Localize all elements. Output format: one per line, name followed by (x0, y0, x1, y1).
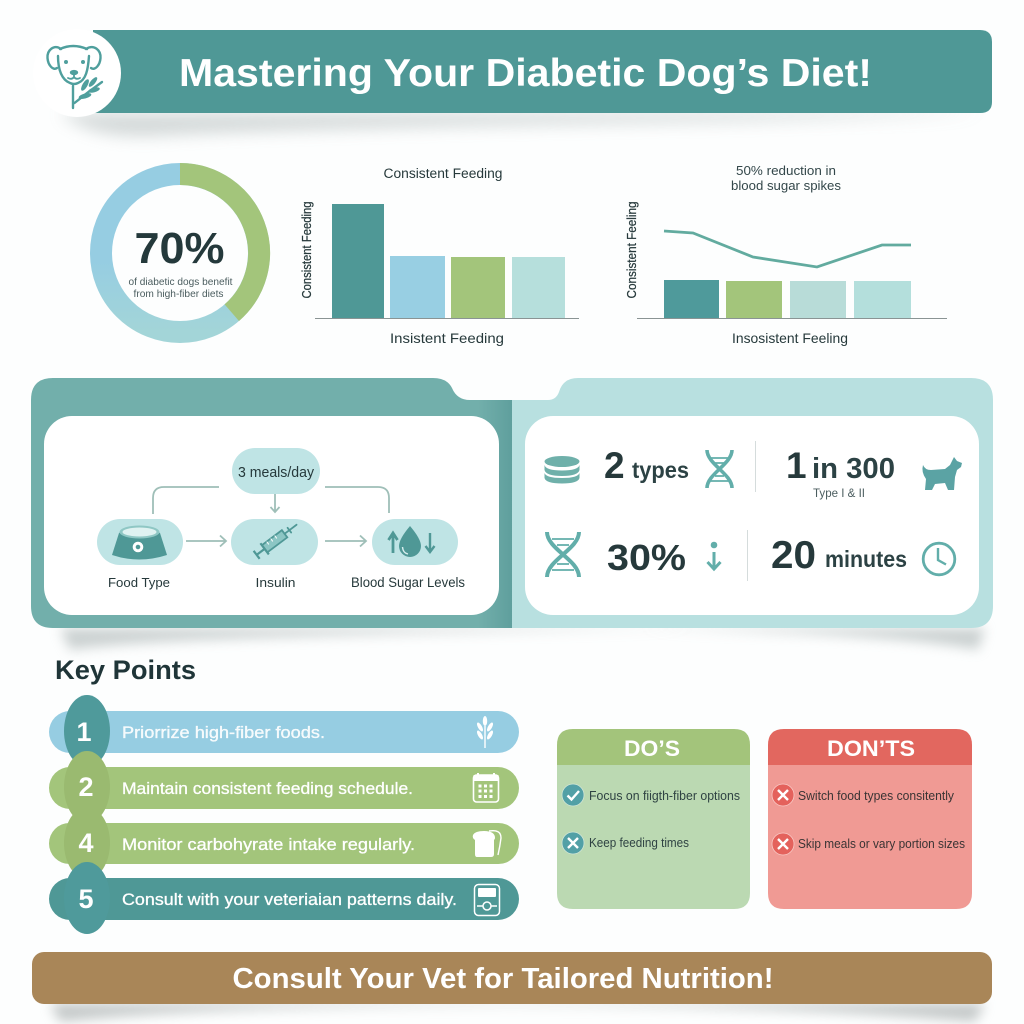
list: key points (49, 695, 519, 934)
donut caption: of diabetic dogs benefit (128, 276, 233, 288)
node: insulin: Insulin (256, 575, 296, 590)
combo chart: blood sugar spikes (624, 163, 947, 346)
don't item 1 (772, 784, 955, 806)
item 2: Maintain consistent feeding schedule. (122, 779, 413, 798)
panel: key statistics (512, 378, 993, 628)
do's header (557, 729, 750, 765)
node: blood sugar levels: Blood Sugar Levels (351, 575, 465, 590)
don'ts header: DON’TS (827, 736, 915, 761)
stat: 20 minutes: 20 (771, 534, 816, 577)
icon: dog (922, 457, 962, 490)
stat: 20 minutes (771, 534, 907, 577)
item 3 (49, 807, 519, 879)
axis label y: Consistent Feeling (624, 202, 639, 298)
trend line (664, 231, 911, 267)
donut chart: 70% stat: from high-fiber diets (134, 288, 224, 300)
panel: feeding flow (31, 378, 512, 628)
axis label x: Insosistent Feeling (732, 330, 848, 346)
stat: 2 types (604, 445, 689, 486)
stat: 1 in 300 (786, 445, 895, 486)
item 1 (49, 695, 519, 767)
axis label x: Insistent Feeding (390, 330, 504, 346)
stat: 1 in 300: 1 (786, 445, 807, 486)
stat: 1 in 300: in 300 (812, 453, 895, 485)
stat: 20 minutes: minutes (825, 546, 907, 572)
panel: do's (557, 729, 750, 909)
item 1: Priorrize high-fiber foods. (122, 723, 325, 742)
item 1: 1 (76, 717, 92, 747)
stat: 30%: 30% (607, 537, 686, 578)
item 4 (49, 862, 519, 934)
axis label y: Consistent Feeding (299, 202, 314, 298)
chart title: 50% reduction in (736, 163, 836, 178)
item 3: Monitor carbohyrate intake regularly. (122, 835, 415, 854)
item 4: 5 (78, 884, 94, 914)
donut value: 70% (134, 224, 224, 273)
item 2 (49, 751, 519, 823)
bars (332, 204, 565, 318)
do item 1: Focus on fiigth-fiber options (589, 789, 740, 803)
node: 3 meals/day: 3 meals/day (238, 465, 315, 481)
stat: 2 types: 2 (604, 445, 625, 486)
node: food type: Food Type (108, 575, 170, 590)
chart title: Consistent Feeding (384, 166, 502, 181)
call to action: Consult Your Vet for Tailored Nutrition! (232, 963, 774, 995)
bars (664, 280, 911, 318)
icon: dog with wheat logo (33, 29, 121, 117)
do item 1 (562, 784, 740, 806)
stat: 2 types: types (632, 457, 689, 483)
combo chart: blood sugar spikes: blood sugar spikes (731, 178, 841, 193)
don't item 1: Switch food types consitently (798, 789, 955, 803)
heading: key points: Key Points (55, 655, 196, 685)
bar chart: consistent feeding (299, 166, 579, 346)
do item 2 (562, 832, 689, 854)
don'ts header (768, 729, 972, 765)
header banner (60, 30, 992, 136)
node: 3 meals/day (232, 448, 320, 494)
icon: stacked discs (544, 456, 580, 484)
don't item 2 (772, 833, 965, 855)
item 4: Consult with your veteriaian patterns daily. (122, 890, 457, 909)
item 3: 4 (78, 828, 94, 858)
icon: clock (923, 543, 955, 575)
node: blood sugar levels (351, 519, 465, 590)
title: Mastering Your Diabetic Dog’s Diet! (179, 52, 872, 95)
panel: don'ts (768, 729, 972, 909)
icon: info arrow down (708, 542, 720, 569)
icon: DNA large (547, 532, 579, 577)
icon: DNA (707, 450, 732, 488)
item 2: 2 (78, 772, 94, 802)
do's header: DO’S (624, 736, 680, 761)
don't item 2: Skip meals or vary portion sizes (798, 837, 965, 851)
node: insulin (231, 519, 318, 590)
donut chart: 70% stat (101, 174, 259, 332)
node: food type (97, 519, 183, 590)
do item 2: Keep feeding times (589, 836, 689, 850)
footer banner (32, 952, 992, 1022)
stat caption: Type I & II (813, 488, 865, 500)
